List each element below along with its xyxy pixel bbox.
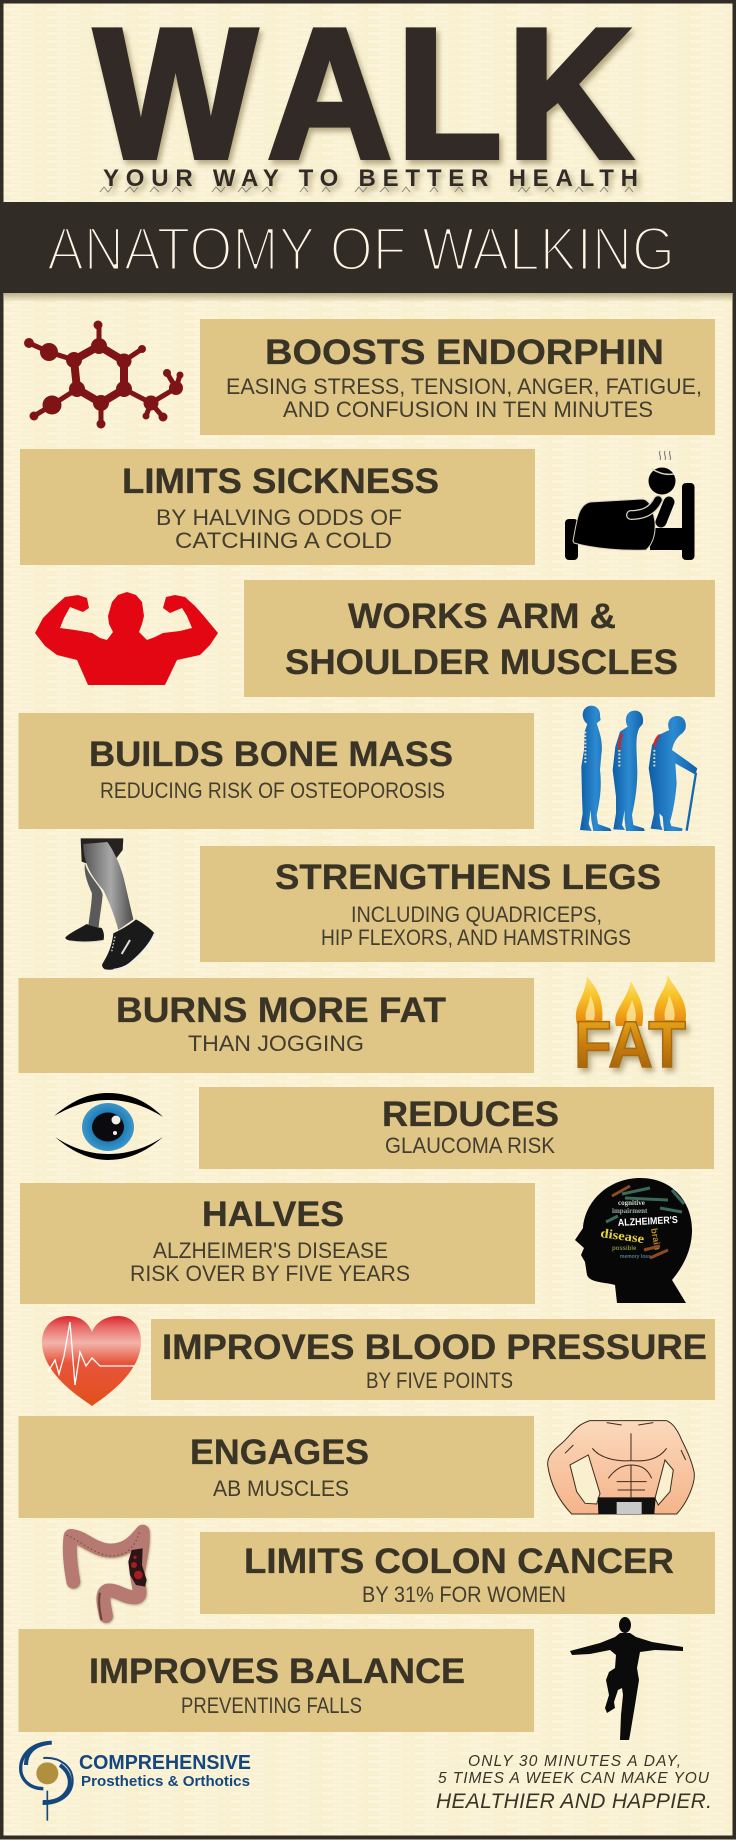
- description: BY FIVE POINTS: [366, 1368, 513, 1393]
- heading: BOOSTS ENDORPHIN: [265, 333, 664, 372]
- icon: eye: [54, 1093, 163, 1160]
- heading: IMPROVES BLOOD PRESSURE: [162, 1328, 707, 1367]
- icon: head silhouette with word cloud: impairment: [612, 1207, 648, 1215]
- icon: head silhouette with word cloud: [575, 1178, 692, 1303]
- closing message: 5 TIMES A WEEK CAN MAKE YOU: [438, 1770, 710, 1787]
- icon: head silhouette with word cloud: cognitive: [618, 1199, 645, 1207]
- description: PREVENTING FALLS: [181, 1693, 362, 1718]
- panel: limits colon cancer: [200, 1532, 715, 1614]
- description: THAN JOGGING: [188, 1031, 364, 1056]
- icon: heart with pulse line: [42, 1316, 141, 1406]
- closing message: HEALTHIER AND HAPPIER.: [436, 1790, 712, 1813]
- panel: arm and shoulder muscles: [244, 580, 715, 697]
- band: Anatomy of Walking: [0, 202, 736, 302]
- description: GLAUCOMA RISK: [385, 1133, 555, 1158]
- heading: REDUCES: [382, 1095, 559, 1134]
- heading: BUILDS BONE MASS: [89, 735, 453, 774]
- icon: head silhouette with word cloud: possible: [612, 1246, 637, 1252]
- panel: improves balance: [18, 1629, 534, 1732]
- panel: halves alzheimer's: [20, 1183, 535, 1304]
- description: INCLUDING QUADRICEPS,: [351, 902, 602, 927]
- panel: strengthens legs: [200, 846, 715, 962]
- logo wordmark: COMPREHENSIVE: [79, 1752, 251, 1774]
- heading: WORKS ARM &: [348, 597, 616, 636]
- icon: head silhouette with word cloud: ALZHEIMER'S: [618, 1215, 678, 1229]
- panel: engages ab muscles: [18, 1416, 534, 1518]
- heading: SHOULDER MUSCLES: [285, 643, 678, 682]
- panel: burns more fat: [18, 978, 534, 1073]
- heading: HALVES: [202, 1195, 344, 1234]
- description: HIP FLEXORS, AND HAMSTRINGS: [321, 925, 631, 950]
- band heading: ANATOMY OF WALKING: [47, 215, 675, 283]
- description: EASING STRESS, TENSION, ANGER, FATIGUE,: [226, 374, 702, 399]
- icon: walking legs with sneakers: [65, 838, 155, 970]
- heading: LIMITS COLON CANCER: [244, 1542, 674, 1581]
- description: AND CONFUSION IN TEN MINUTES: [283, 397, 653, 422]
- icon: person balancing on one leg: [570, 1617, 683, 1740]
- heading: ENGAGES: [190, 1433, 369, 1472]
- icon: sick person in bed: [565, 451, 694, 560]
- logo wordmark: Prosthetics & Orthotics: [81, 1774, 250, 1790]
- icon: endorphin molecule: [24, 320, 184, 428]
- icon: flexing muscleman: [35, 592, 218, 685]
- description: CATCHING A COLD: [175, 528, 392, 553]
- closing message: [436, 1753, 712, 1813]
- icon: colon with tumour: [67, 1530, 147, 1620]
- icon: head silhouette with word cloud: brain: [649, 1227, 663, 1251]
- panel: builds bone mass: [18, 713, 534, 829]
- heading: STRENGTHENS LEGS: [275, 858, 661, 897]
- icon: muscular torso: [548, 1421, 694, 1514]
- panel: limits sickness: [20, 449, 535, 565]
- heading: LIMITS SICKNESS: [122, 462, 439, 501]
- icon: flaming FAT letters: [574, 975, 686, 1081]
- subtitle with walking figures: YOUR WAY TO BETTER HEALTH: [103, 165, 638, 192]
- description: BY HALVING ODDS OF: [156, 505, 402, 530]
- logo mark: [21, 1743, 73, 1821]
- description: RISK OVER BY FIVE YEARS: [130, 1261, 410, 1286]
- heading: IMPROVES BALANCE: [89, 1652, 465, 1691]
- description: AB MUSCLES: [213, 1476, 349, 1501]
- description: BY 31% FOR WOMEN: [362, 1582, 566, 1607]
- panel: reduces glaucoma: [199, 1087, 714, 1169]
- logo: Comprehensive Prosthetics & Orthotics: [21, 1743, 251, 1821]
- icon: head silhouette with word cloud: disease: [600, 1225, 645, 1246]
- icon: three figures with progressive osteoporosis: [580, 706, 697, 831]
- description: REDUCING RISK OF OSTEOPOROSIS: [100, 778, 445, 803]
- panel: boosts endorphin: [200, 319, 715, 435]
- description: ALZHEIMER'S DISEASE: [153, 1238, 388, 1263]
- closing message: ONLY 30 MINUTES A DAY,: [468, 1753, 681, 1770]
- icon: head silhouette with word cloud: memory loss: [620, 1254, 651, 1260]
- icon: flaming FAT letters: FAT: [574, 1007, 686, 1081]
- heading: BURNS MORE FAT: [116, 991, 446, 1030]
- panel: improves blood pressure: [151, 1319, 715, 1400]
